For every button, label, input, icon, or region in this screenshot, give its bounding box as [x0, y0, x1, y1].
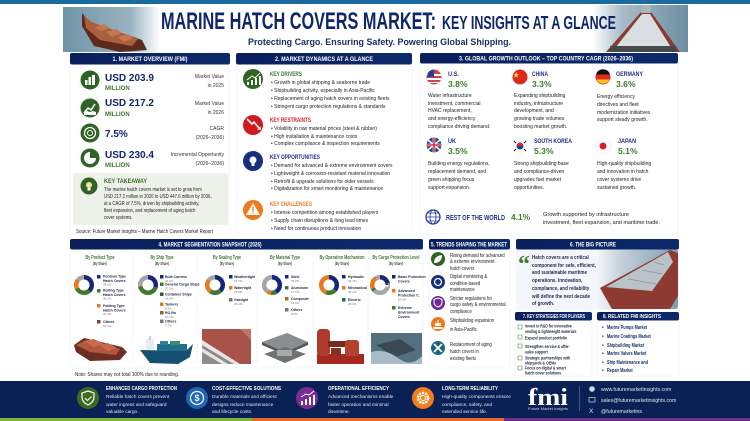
segment: product type: By Product Type — [86, 255, 115, 261]
country: china — [512, 70, 567, 130]
image: seal cross-section — [202, 329, 251, 364]
metric: market value 2025: MILLION — [105, 86, 130, 92]
country: uk: replacement demand, and — [428, 169, 486, 175]
image: container ship — [140, 336, 193, 364]
segment: operation mechanism: (By Share) — [335, 261, 349, 266]
trend: asia-pacific: in Asia-Pacific — [450, 327, 477, 332]
panel: market dynamics — [236, 53, 412, 234]
block: key drivers: • Shipbuilding activity, especially in Asia-Pacific — [271, 88, 375, 94]
trend: rising demand: hatch covers — [450, 266, 475, 271]
heading: market dynamics: 2. MARKET DYNAMICS AT A GLANCE — [275, 56, 374, 63]
related list: • — [602, 325, 604, 331]
panel: market overview — [70, 53, 230, 235]
block: key restraints: • Volatility in raw material prices (steel & rubber) — [271, 126, 377, 132]
trend: rising demand: & extreme environment — [450, 259, 495, 264]
donut: material — [264, 277, 280, 293]
segment: product type: Pontoon Type — [103, 274, 126, 278]
heading: global growth — [420, 53, 678, 64]
big picture text — [531, 255, 596, 307]
contact details: @futuremarketins — [601, 409, 642, 415]
big picture text: of growth. — [532, 301, 555, 307]
segment: product type: Hatch Covers — [103, 279, 126, 283]
metric: market value 2026: USD 217.2 — [105, 98, 154, 109]
country: china: boosting market growth. — [514, 124, 567, 130]
block: key challenges: KEY CHALLENGES — [270, 201, 312, 208]
callout: key takeaway: The marine hatch covers market is set to grow from — [104, 187, 202, 192]
contact details — [589, 386, 676, 415]
segment: material type: 54.2% — [291, 279, 300, 283]
benefit: operational efficiency: downtime. — [328, 409, 350, 415]
benefit: long-term reliability: compliance, safety, and — [442, 402, 492, 408]
segment: ship type: 27.1% — [165, 286, 174, 290]
benefit: cost-effective solutions: and lifecycle costs. — [212, 409, 252, 415]
country: china: 3.3% — [532, 79, 552, 89]
block: key drivers: • Replacement of aging hatch covers in existing fleets — [271, 96, 390, 102]
segment: cargo protection level: Protection C. — [398, 294, 420, 298]
segment: cargo protection level — [371, 255, 426, 364]
metric: market value 2026 — [80, 98, 224, 118]
country: south korea: upgrades fuel market — [514, 177, 562, 183]
segment: cargo protection level: By Cargo Protection Level — [372, 255, 420, 261]
callout: key takeaway: cover systems. — [104, 215, 133, 220]
segment: ship type: 31.2% — [165, 279, 174, 283]
trend: rising demand — [431, 252, 505, 271]
title: KEY INSIGHTS AT A GLANCE — [442, 13, 616, 33]
trend: stricter regulations — [431, 296, 506, 314]
header image: bulk carrier left — [63, 7, 160, 52]
footer band — [0, 381, 750, 421]
country: japan: and innovation in hatch — [597, 169, 649, 175]
segment: cargo protection level: Advanced — [398, 289, 415, 293]
related list: • — [602, 343, 604, 349]
strategy list: Strengthen service & after- — [525, 344, 570, 349]
country: japan: sustained growth. — [597, 185, 636, 191]
related list: • — [602, 360, 604, 366]
country: uk: support expansion. — [428, 185, 470, 191]
segment: ship type: 7.7% — [165, 324, 172, 328]
country: china: CHINA — [532, 71, 548, 78]
segment: ship type: 14.0% — [165, 296, 174, 300]
country: germany: GERMANY — [616, 71, 644, 78]
benefit: enhanced cargo protection: ENHANCED CARGO PROTECTION — [106, 386, 177, 392]
block: key challenges: • Intense competition among established players — [271, 210, 379, 216]
segment: ship type: 8.2% — [165, 306, 172, 310]
big picture text: will define the next decade — [531, 294, 590, 300]
header image: deck view right — [593, 5, 688, 52]
country: us: investment, commercial — [428, 101, 481, 107]
trend: asia-pacific — [431, 317, 495, 332]
trend: digital monitoring: condition-based — [450, 281, 481, 286]
segment: material type: By Material Type — [270, 255, 300, 261]
related list — [602, 325, 651, 374]
related list: Repair Market — [607, 368, 633, 373]
segment: ship type: Tankers — [165, 302, 178, 306]
country: south korea: 5.3% — [534, 146, 554, 156]
segment: cargo protection level: Basic Protection — [398, 275, 426, 279]
panel: trends — [429, 239, 510, 368]
segment: material type: Others — [291, 308, 302, 312]
block: key drivers: • Growth in global shipping & seaborne trade — [271, 80, 370, 86]
strategy list: sealing & lightweight materials — [525, 329, 577, 334]
segment: operation mechanism: 48.1% — [348, 290, 357, 294]
segment: product type: Rolling Type — [103, 288, 124, 292]
block: key drivers: • Stringent cargo protection regulations & standards — [271, 104, 386, 110]
heading: related insights: 8. RELATED FMI INSIGHTS — [603, 314, 662, 320]
block: key restraints: • Complex compliance & inspection requirements — [271, 141, 380, 147]
segment: cargo protection level: 54.4% — [398, 298, 407, 302]
note: Note: Shares may not total 100% due to rounding. — [75, 372, 179, 378]
region: rest of the world: Growth supported by infrastructure — [543, 212, 629, 218]
country: uk: UK — [448, 138, 456, 145]
segment: ship type: General Cargo Ships — [165, 282, 200, 286]
metric: market value 2025: Market Value — [195, 74, 224, 80]
metric: incremental opportunity: USD 230.4 — [105, 150, 154, 161]
heading: segmentation — [70, 239, 423, 250]
segment: cargo protection level: (By Share) — [389, 261, 403, 266]
segment: sealing type: (By Share) — [220, 261, 234, 266]
segment: product type: 10.6% — [103, 324, 112, 328]
benefit: enhanced cargo protection: valuable cargo. — [106, 409, 139, 415]
country: us: HVAC replacement, — [428, 108, 472, 114]
segment: ship type: RO-Ro — [165, 311, 176, 315]
country: china: growing trade volumes — [514, 116, 565, 122]
strategy list — [518, 323, 577, 376]
segment: operation mechanism: By Operation Mechanism — [320, 255, 365, 261]
benefit: cost-effective solutions: Durable materials and efficient — [212, 394, 277, 400]
country: south korea: Strong shipbuilding base — [514, 161, 569, 167]
callout: key takeaway: USD 217.2 million in 2026 to USD 447.6 million by 2036, — [104, 194, 212, 199]
related list: Ship Maintenance and — [607, 360, 648, 365]
donut: product — [76, 277, 92, 293]
icon: quote mark: “ — [518, 252, 530, 278]
segment: product type: 36.2% — [103, 296, 112, 300]
big picture text: component for safe, efficient, — [532, 263, 596, 269]
source note: Source: Future Market Insights – Marine Hatch Covers Market Report — [76, 229, 214, 235]
benefit: enhanced cargo protection — [77, 386, 177, 415]
country: china: Expanding shipbuilding — [514, 93, 566, 99]
heading: segmentation: 4. MARKET SEGMENTATION SNAPSHOT (2026) — [158, 242, 262, 248]
contact details: www.futuremarketinsights.com — [601, 387, 671, 393]
block: key challenges: • Need for continuous product innovation — [271, 226, 361, 232]
trend: stricter regulations: cargo safety & environmental — [450, 302, 506, 307]
block: key opportunities: • Retrofit & upgrade solutions for older vessels — [271, 179, 374, 185]
block: key opportunities: • Demand for advanced & extreme environment covers — [271, 163, 393, 169]
contact details: sales@futuremarketinsights.com — [601, 398, 676, 404]
heading: market dynamics — [236, 53, 412, 64]
related list: Marine Valves Market — [607, 351, 647, 356]
metric: incremental opportunity — [80, 148, 224, 169]
image: steel panels — [262, 333, 308, 363]
segment: sealing type: By Sealing Type — [213, 255, 241, 261]
segment: ship type: By Ship Type — [150, 255, 174, 261]
donut: cargo — [372, 277, 388, 293]
metric: market value 2026: in 2026 — [208, 110, 224, 116]
segment: product type: Folding Type — [103, 304, 125, 308]
metric: incremental opportunity: Incremental Opportunity — [171, 152, 224, 158]
metric: market value 2025 — [80, 70, 224, 92]
segment: product type: Hatch Covers — [103, 308, 126, 312]
image: hydraulic machinery — [317, 329, 364, 364]
block: key opportunities: KEY OPPORTUNITIES — [270, 154, 320, 161]
heading: market overview — [70, 53, 230, 64]
segment: operation mechanism: 33.7% — [348, 279, 357, 283]
country: japan — [596, 138, 651, 191]
country: us: U.S. — [448, 71, 459, 78]
related list: Marine Coatings Market — [607, 334, 651, 339]
country: south korea: opportunities. — [514, 185, 544, 191]
segment: product type: Others — [103, 320, 114, 324]
metric: market value 2025: in 2025 — [208, 83, 224, 89]
country: uk: 3.5% — [448, 146, 468, 156]
trend: replacement: existing fleets — [450, 356, 477, 361]
trend: stricter regulations: compliance — [450, 309, 472, 314]
logo: fmi: fmi — [528, 385, 568, 411]
segment: product type: Hatch Covers — [103, 293, 126, 297]
region: rest of the world — [426, 210, 660, 226]
segment: material type: 14.6% — [291, 301, 300, 305]
segment: ship type: 10.1% — [165, 315, 174, 319]
panel: global growth outlook — [420, 53, 678, 234]
donut: sealing — [207, 277, 223, 293]
related list: • — [602, 351, 604, 357]
big picture text: compliance, and reliability — [532, 286, 589, 292]
trend: digital monitoring: maintenance — [450, 287, 475, 292]
benefit: enhanced cargo protection: Reliable hatch covers prevent — [106, 394, 170, 400]
heading: key strategies: 7. KEY STRATEGIES FOR PLAYERS — [523, 314, 585, 320]
heading: big picture — [516, 239, 679, 250]
segment: sealing type: Watertight — [234, 286, 252, 290]
country: uk: Building energy regulations, — [428, 161, 490, 167]
country: south korea — [512, 138, 572, 191]
trend: replacement: Replacement of aging — [450, 342, 492, 347]
callout: key takeaway: KEY TAKEAWAY — [104, 178, 148, 185]
segment: sealing type: 25.8% — [234, 290, 243, 294]
segment: sealing type: 51.2% — [234, 279, 243, 283]
donut: ship — [140, 277, 156, 293]
country: germany: 3.6% — [616, 79, 636, 89]
panel: market segmentation — [70, 239, 426, 368]
block: key restraints — [243, 115, 380, 147]
benefit: cost-effective solutions: COST-EFFECTIVE SOLUTIONS — [212, 386, 281, 392]
segment: product type: 38.6% — [103, 282, 112, 286]
strategy list: hatch cover solutions — [525, 370, 562, 376]
segment: material type: Steel — [291, 275, 299, 279]
block: key opportunities — [243, 151, 393, 192]
country: us — [426, 70, 490, 130]
segment: operation mechanism: Hydraulic — [348, 275, 364, 279]
donut: operation — [321, 277, 337, 293]
strategy list: shipyards & OEMs — [525, 360, 557, 366]
related list: Marine Pumps Market — [607, 325, 648, 330]
benefit: cost-effective solutions: designs reduce maintenance — [212, 402, 274, 408]
country: japan: JAPAN — [618, 138, 636, 145]
contact details: X — [589, 408, 594, 415]
country: japan: 5.1% — [618, 146, 638, 156]
block: key challenges: • Supply chain disruptions & long lead times — [271, 218, 369, 224]
country: china: development, and — [514, 108, 554, 114]
metric: cagr: (2026–2036) — [196, 135, 224, 141]
segment: sealing type: Gastight — [234, 298, 249, 302]
trend: stricter regulations: Stricter regulations for — [450, 296, 492, 301]
segment: product type: (By Share) — [93, 261, 107, 266]
benefit: enhanced cargo protection: water ingress and safeguard — [106, 402, 167, 408]
country: south korea: SOUTH KOREA — [534, 138, 572, 145]
heading: big picture: 6. THE BIG PICTURE — [570, 242, 617, 248]
segment: ship type — [140, 255, 200, 364]
segment: cargo protection level: Extreme — [398, 306, 412, 310]
related list: • — [602, 368, 604, 374]
trend: asia-pacific: Shipbuilding expansion — [450, 318, 495, 323]
segment: operation mechanism: Mechanical — [348, 286, 367, 290]
strategy list: Invest in R&D for innovative — [525, 323, 572, 329]
country: us: compliance driving demand. — [428, 124, 490, 130]
country: germany: directives and fleet — [597, 102, 639, 108]
metric: market value 2026: MILLION — [105, 112, 130, 118]
strategy list: Expand product portfolio — [525, 335, 567, 341]
benefit: long-term reliability: extended service life. — [442, 409, 487, 415]
metric: market value 2025: USD 203.9 — [105, 73, 154, 84]
segment: sealing type: Weathertight — [234, 275, 256, 279]
segment: material type: 9.6% — [291, 312, 298, 316]
country: china: industry, infrastructure — [514, 101, 563, 107]
metric: incremental opportunity: (2026–2036) — [196, 161, 224, 167]
benefit: long-term reliability: High-quality components ensure — [442, 394, 511, 400]
panel: big picture — [516, 239, 679, 310]
segment: material type: 27.1% — [291, 290, 300, 294]
heading: global growth: 3. GLOBAL GROWTH OUTLOOK – TOP COUNTRY CAGR (2026–2036) — [459, 56, 633, 62]
heading: trends: 5. TRENDS SHAPING THE MARKET — [431, 242, 507, 248]
benefit: cost-effective solutions — [186, 386, 281, 415]
country: us: 3.8% — [448, 79, 468, 89]
country: japan: cover systems drive — [597, 177, 641, 183]
segment: ship type: (By Share) — [155, 261, 169, 266]
benefit: operational efficiency: faster operation and minimal — [328, 402, 389, 408]
image: deck photo — [597, 249, 678, 309]
country: germany: Energy efficiency — [597, 94, 635, 100]
block: key opportunities: • Digitalization for smart monitoring & maintenance — [271, 186, 383, 192]
segment: material type: Aluminum — [291, 286, 308, 290]
region: rest of the world: REST OF THE WORLD — [446, 215, 505, 222]
benefit: cost-effective solutions: $ — [194, 393, 200, 403]
region: rest of the world: investment, fleet expansion, and maritime trade. — [543, 220, 660, 226]
region: rest of the world: 4.1% — [511, 212, 531, 222]
metric: market value 2026: Market Value — [195, 101, 224, 107]
callout: key takeaway — [73, 173, 228, 225]
segment: cargo protection level: Covers — [398, 280, 410, 284]
big picture text: and sustainable maritime — [532, 270, 587, 276]
metric: cagr: CAGR — [210, 126, 224, 132]
segment: material type: (By Share) — [278, 261, 292, 266]
country: uk — [426, 138, 490, 191]
segment: material type — [262, 255, 309, 363]
segment: sealing type: 26.2% — [234, 302, 243, 306]
country: japan: High-quality shipbuilding — [597, 161, 651, 167]
country: germany: modernization initiatives — [597, 110, 651, 116]
benefit: operational efficiency — [296, 386, 394, 415]
metric: cagr: 7.5% — [105, 129, 128, 140]
trend: rising demand: Rising demand for advanced — [450, 253, 505, 258]
strategy list: sales support — [525, 349, 548, 355]
benefit: long-term reliability: LONG-TERM RELIABILITY — [442, 386, 498, 392]
logo: fmi: Future Market Insights — [528, 407, 568, 411]
segment: product type — [74, 255, 127, 361]
benefit: operational efficiency: Advanced mechanisms enable — [328, 394, 394, 400]
trend: digital monitoring: Digital monitoring & — [450, 274, 488, 279]
block: key restraints: • High installation & maintenance costs — [271, 134, 358, 140]
benefit: operational efficiency: OPERATIONAL EFFICIENCY — [328, 386, 389, 392]
segment: ship type: Container Ships — [165, 292, 192, 296]
related list: Shipbuilding Market — [607, 343, 645, 348]
block: key restraints: KEY RESTRAINTS — [270, 117, 311, 124]
related list: • — [602, 334, 604, 340]
segment: operation mechanism: 28.3% — [348, 302, 357, 306]
image: hatch ship — [74, 338, 127, 361]
country: germany — [596, 69, 651, 123]
big picture text: operations. Innovation, — [532, 278, 583, 284]
trend: replacement: hatch covers in — [450, 349, 479, 354]
country: uk: green shipping focus — [428, 177, 475, 183]
metric: incremental opportunity: MILLION — [105, 163, 130, 169]
callout: key takeaway: at a CAGR of 7.5%, driven by shipbuilding activity, — [104, 201, 199, 206]
strategy list: Focus on digital & smart — [525, 365, 567, 371]
country: us: and energy-efficiency — [428, 116, 476, 122]
block: key drivers — [243, 69, 390, 110]
segment: ship type: Others — [165, 320, 176, 324]
top bar — [0, 0, 750, 4]
panel: related insights — [597, 312, 679, 376]
big picture text: Hatch covers are a critical — [532, 255, 589, 261]
segment: sealing type — [202, 255, 256, 364]
segment: ship type: Bulk Carriers — [165, 275, 187, 279]
country: south korea: and compliance-driven — [514, 169, 565, 175]
block: key challenges — [243, 200, 379, 232]
block: key drivers: KEY DRIVERS — [270, 71, 302, 78]
trend: replacement — [431, 341, 492, 361]
segment: product type: 20.4% — [103, 312, 112, 316]
callout: key takeaway: fleet expansion, and replacement of aging hatch — [104, 208, 196, 213]
segment: cargo protection level: Covers — [398, 315, 410, 319]
benefit: long-term reliability — [412, 386, 511, 415]
metric: cagr — [80, 124, 224, 142]
country: us: Water infrastructure — [428, 93, 472, 99]
segment: operation mechanism — [317, 255, 367, 364]
image: hatch in waves — [371, 333, 422, 364]
segment: cargo protection level: Environment — [398, 310, 420, 314]
panel: key strategies — [515, 312, 592, 376]
segment: operation mechanism: Electric — [348, 298, 361, 302]
title: MARINE HATCH COVERS MARKET: — [161, 8, 436, 35]
strategy list: Strategic partnerships with — [525, 355, 571, 361]
heading: market overview: 1. MARKET OVERVIEW (FMI) — [112, 56, 188, 63]
trend: digital monitoring — [431, 274, 488, 292]
country: germany: support steady growth. — [597, 117, 648, 123]
segment: material type: Composite — [291, 297, 309, 301]
subtitle: Protecting Cargo. Ensuring Safety. Powering Global Shipping. — [248, 37, 511, 47]
block: key opportunities: • Lightweight & corrosion-resistant material innovation — [271, 171, 390, 177]
